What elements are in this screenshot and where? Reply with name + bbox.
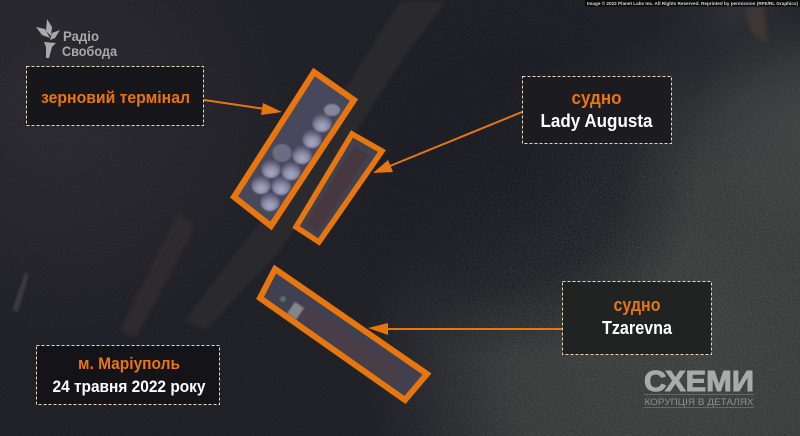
label: location and date: м. Маріуполь xyxy=(78,354,180,373)
ship: Tzarevna xyxy=(260,269,427,400)
label: Lady Augusta xyxy=(522,76,672,144)
label: Lady Augusta: Lady Augusta xyxy=(540,111,653,131)
label: grain terminal xyxy=(26,66,204,126)
credit line: Image © 2022 Planet Labs Inc. All Rights Reserved. Reprinted by permission (RFE/RL Graphics) xyxy=(587,0,798,7)
logo: Skhemy: КОРУПЦІЯ В ДЕТАЛЯХ xyxy=(644,397,754,408)
logo: Skhemy: СХЕМИ xyxy=(644,366,754,398)
label: location and date: 24 травня 2022 року xyxy=(52,377,206,396)
label: Tzarevna: судно xyxy=(614,295,660,315)
arrow: Lady Augusta xyxy=(373,112,522,173)
label: grain terminal: зерновий термінал xyxy=(41,88,190,107)
highlight outline: grain terminal xyxy=(234,72,354,226)
land: pier and docks xyxy=(12,2,445,338)
arrow: grain terminal xyxy=(204,100,282,115)
arrow: Tzarevna xyxy=(368,323,562,335)
highlight outline: Tzarevna xyxy=(260,269,427,400)
logo wordmark xyxy=(62,29,117,59)
label: Lady Augusta: судно xyxy=(572,88,622,108)
logo: Radio Svoboda xyxy=(36,19,117,59)
logo wordmark: Радіо xyxy=(63,29,99,44)
label: Tzarevna: Tzarevna xyxy=(602,318,673,338)
grain terminal silos xyxy=(234,72,354,226)
ship: Lady Augusta xyxy=(296,134,382,242)
label: Tzarevna xyxy=(562,282,712,354)
label: location and date xyxy=(36,346,220,404)
icon: torch xyxy=(36,19,60,58)
logo wordmark: Свобода xyxy=(62,44,117,59)
highlight outline: Lady Augusta xyxy=(296,134,382,242)
